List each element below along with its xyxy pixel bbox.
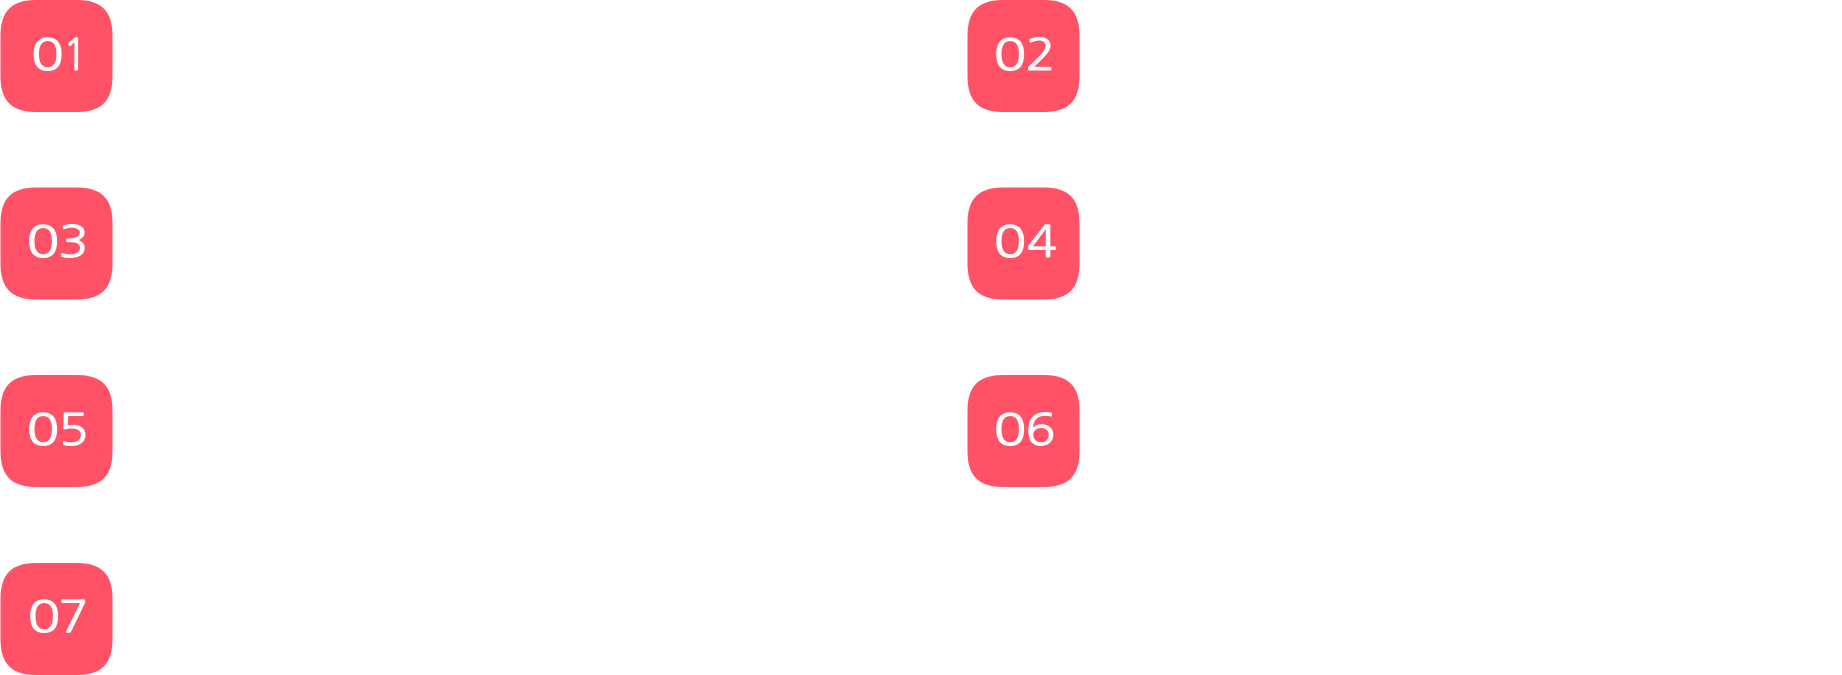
number 03 xyxy=(26,221,88,264)
number 06: 0 xyxy=(994,409,1026,452)
number 03: 3 xyxy=(58,221,88,264)
number 07 xyxy=(28,596,88,639)
number 04 xyxy=(994,221,1057,264)
number 02: 0 xyxy=(994,34,1026,77)
number 05: 5 xyxy=(58,409,88,452)
badge 01 xyxy=(0,0,112,112)
number 02: 2 xyxy=(1026,34,1056,77)
badge 07 xyxy=(0,563,112,675)
badge 06 xyxy=(968,375,1080,487)
badge 03 xyxy=(0,188,112,300)
number 01: 0 xyxy=(31,34,64,77)
number 07: 0 xyxy=(28,596,60,639)
number 06: 6 xyxy=(1026,409,1056,452)
number 01: 1 xyxy=(63,34,87,77)
number 05 xyxy=(26,409,88,452)
number 02 xyxy=(994,34,1056,77)
number 03: 0 xyxy=(26,221,60,264)
number 06 xyxy=(994,409,1056,452)
badge 04 xyxy=(968,188,1080,300)
number 07: 7 xyxy=(58,596,88,639)
badge 02 xyxy=(968,0,1080,112)
number 04: 0 xyxy=(994,221,1026,264)
number 01 xyxy=(31,34,87,77)
badge 05 xyxy=(0,375,112,487)
number 04: 4 xyxy=(1027,221,1057,264)
number 05: 0 xyxy=(26,409,60,452)
